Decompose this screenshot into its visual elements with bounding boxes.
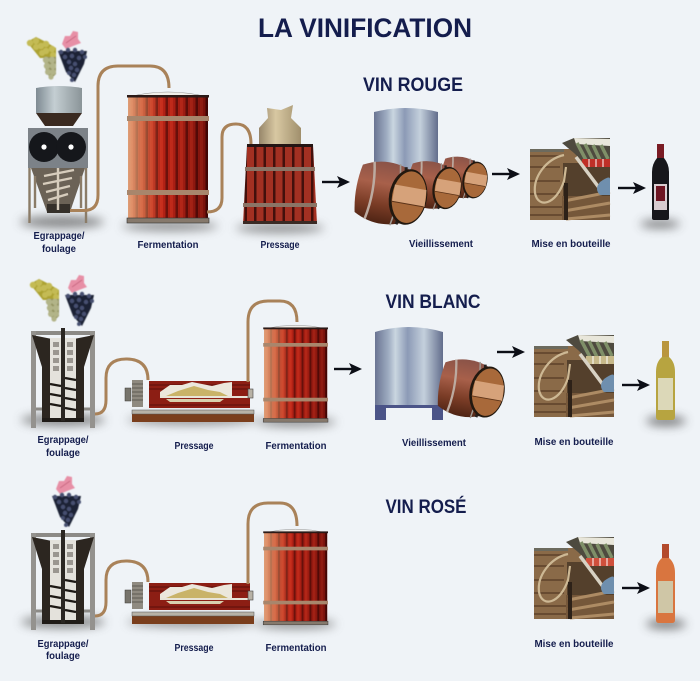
floor shadows (20, 216, 680, 233)
pipe (95, 561, 148, 616)
icon: red grapes (58, 31, 87, 82)
labels: Egrappage/ (38, 638, 89, 650)
press (243, 105, 317, 224)
pipe (70, 66, 169, 210)
icon: white grapes (27, 37, 56, 80)
labels: Mise en bouteille (534, 436, 614, 448)
labels: Mise en bouteille (534, 638, 614, 650)
arrow (492, 168, 520, 180)
section: vin rose (21, 476, 686, 662)
bottle: white wine (656, 341, 675, 420)
stainless tank (374, 108, 438, 172)
section: vin rouge (20, 31, 680, 255)
labels: foulage (42, 243, 76, 255)
bottling line (530, 138, 610, 220)
labels: foulage (46, 650, 80, 662)
stainless tank (375, 327, 443, 420)
crusher (31, 530, 95, 630)
labels: Vieillissement (402, 437, 466, 449)
fermentation tank (127, 92, 209, 223)
press (125, 380, 254, 422)
icon: red grapes (65, 275, 94, 326)
icon: grapes (52, 476, 81, 527)
floor shadows (21, 414, 686, 427)
icon: white grapes (30, 279, 59, 322)
press (125, 582, 254, 624)
crusher (31, 328, 95, 428)
pipe (207, 124, 251, 212)
heading: vin rose: VIN ROSÉ (386, 496, 466, 518)
section: vin blanc (21, 275, 686, 459)
heading: vin blanc: VIN BLANC (386, 292, 481, 313)
arrow (322, 176, 350, 188)
barrels (351, 154, 491, 231)
pipe (95, 359, 148, 414)
arrow (334, 363, 362, 375)
title: LA VINIFICATION (258, 13, 472, 43)
labels (38, 434, 614, 459)
labels (34, 230, 611, 255)
fermentation tank (263, 325, 328, 422)
bottling line (534, 537, 614, 619)
labels: Pressage (174, 642, 214, 654)
fermentation tank (263, 529, 328, 625)
labels: Egrappage/ (34, 230, 85, 242)
pipe (248, 503, 297, 584)
labels: Mise en bouteille (532, 238, 611, 250)
arrow (618, 182, 646, 194)
arrow (622, 379, 650, 391)
labels: Pressage (260, 239, 300, 251)
labels: Vieillissement (409, 238, 473, 250)
labels: foulage (46, 447, 80, 459)
labels: Egrappage/ (38, 434, 89, 446)
arrow (622, 582, 650, 594)
barrel (434, 355, 509, 423)
bottling line (534, 335, 614, 417)
crusher-destemmer machine (28, 86, 88, 223)
arrow (497, 346, 525, 358)
labels: Fermentation (138, 239, 198, 251)
pipe (248, 301, 297, 382)
labels: Fermentation (266, 642, 326, 654)
floor shadows (21, 616, 686, 629)
heading: vin rouge: VIN ROUGE (363, 75, 463, 96)
labels (38, 638, 614, 662)
bottle: rose wine (656, 544, 675, 623)
bottle: red wine (652, 144, 669, 220)
labels: Pressage (174, 440, 214, 452)
labels: Fermentation (266, 440, 326, 452)
